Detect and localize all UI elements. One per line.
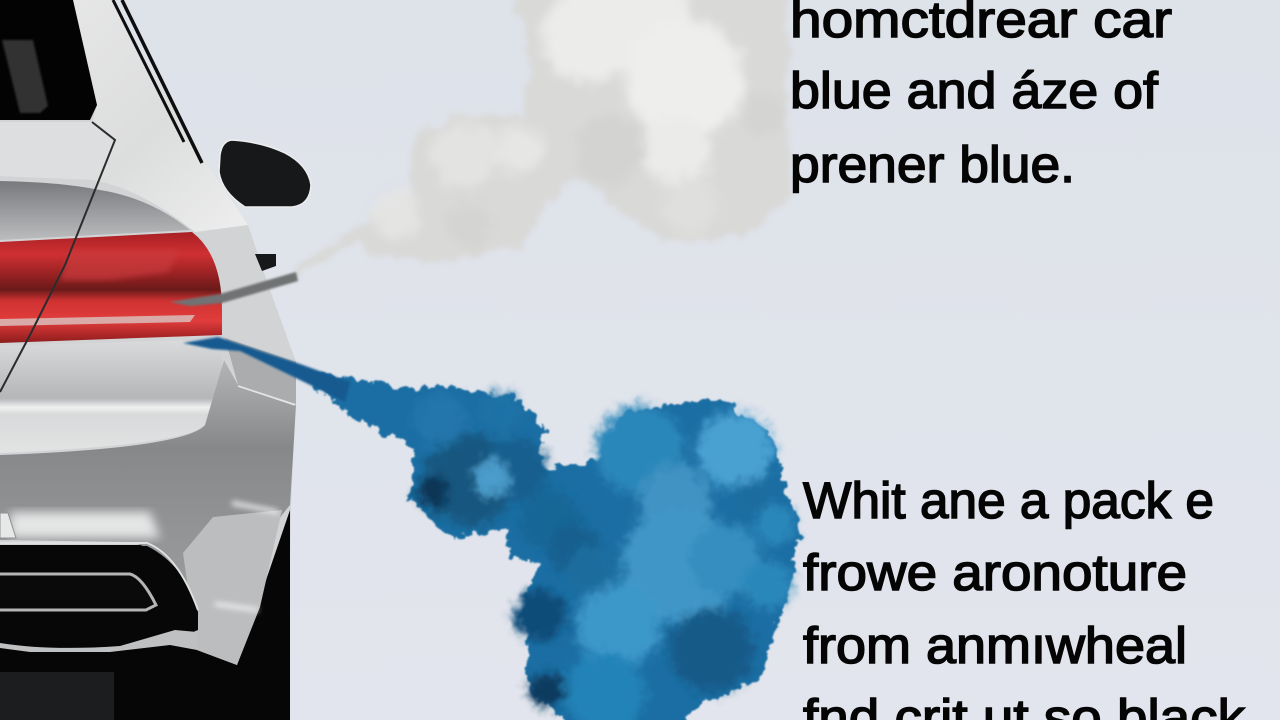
tail light: [0, 232, 222, 343]
blue smoke stream and arrow: [183, 337, 350, 402]
car: [0, 0, 311, 720]
exhaust tip: [0, 574, 156, 610]
panel highlights: [215, 503, 278, 610]
tail light chrome strip: [0, 315, 195, 326]
blue cloud silhouette: [296, 368, 800, 720]
lower corner panel: [183, 510, 282, 665]
lower diffuser trim: [0, 630, 197, 652]
rear window: [0, 0, 97, 120]
sensor: [255, 254, 276, 271]
reflector: [0, 513, 16, 538]
text block: top: [790, 0, 1172, 193]
c-pillar: [0, 0, 248, 232]
window trim stripes: [113, 0, 202, 163]
text block: top: prener blue.: [790, 136, 1075, 193]
rear quarter: [225, 338, 296, 404]
shut line: [0, 122, 115, 392]
window reflection: [2, 40, 48, 113]
text block: top: blue and áze of: [790, 62, 1159, 119]
text block: bottom: frowe aronoture: [803, 544, 1187, 601]
rear bumper: [0, 360, 296, 650]
blue cloud shading: [414, 392, 795, 720]
side mirror: [219, 140, 311, 207]
white smoke cloud: [290, 0, 790, 282]
rear wheel and underbody: [0, 510, 290, 720]
grey trunk recess: [0, 181, 190, 240]
bumper bright band: [10, 512, 160, 538]
text block: bottom: [803, 472, 1246, 720]
blue smoke cloud: [296, 368, 800, 720]
tail light inner lens: [60, 250, 180, 280]
car body silhouette: [0, 0, 296, 665]
bumper crease: [0, 543, 198, 610]
text block: bottom: from anmıwheal: [803, 617, 1187, 674]
white cloud shading: [373, 0, 787, 249]
white cloud silhouette: [290, 0, 790, 282]
upper lid panel: [0, 122, 115, 180]
white smoke stream and arrow: [170, 272, 298, 306]
quarter crease: [238, 386, 295, 405]
text block: bottom: Whit ane a pack e: [803, 472, 1214, 529]
lower trunk lid: [0, 339, 222, 453]
licence plate recess: [0, 672, 114, 720]
exhaust recess: [0, 546, 198, 645]
